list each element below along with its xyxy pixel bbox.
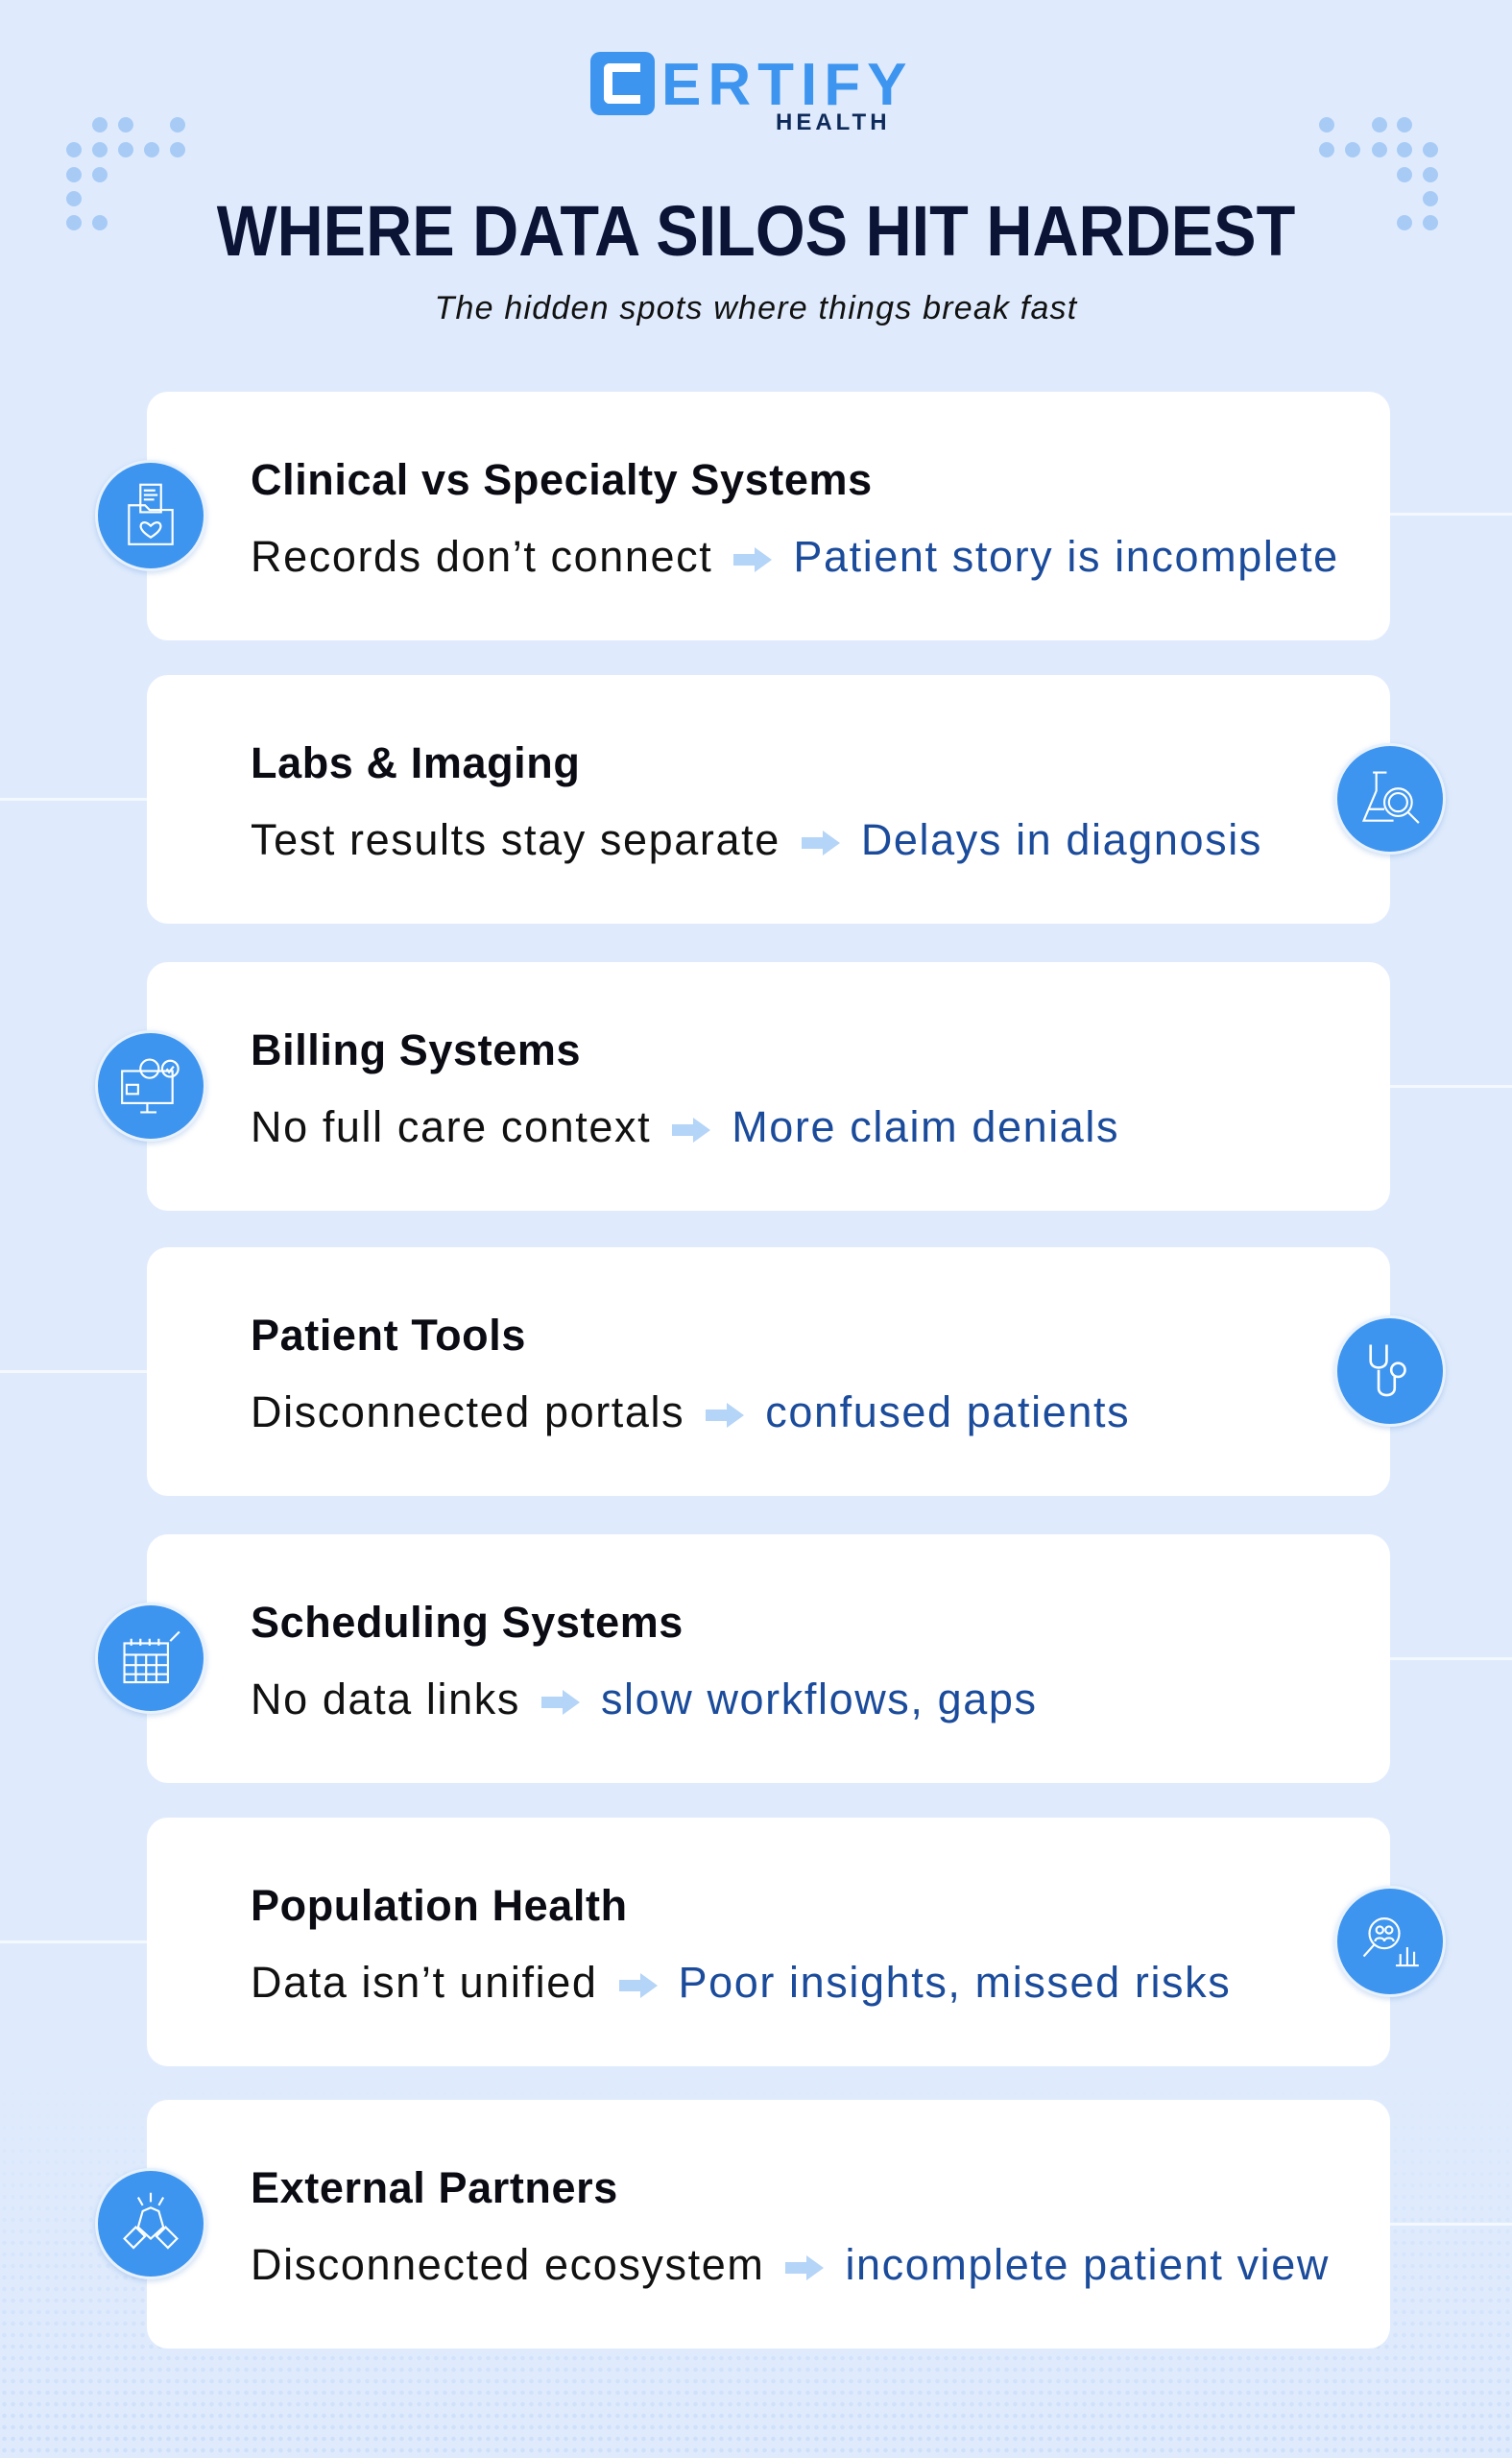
- icon: calendar: [95, 1603, 206, 1714]
- decorative dots left: [66, 117, 185, 230]
- panel: clinical vs specialty: Records don’t connect Patient story is incomplete: [251, 532, 1339, 581]
- panel: labs & imaging: Labs & Imaging: [251, 738, 580, 787]
- panel: external partners: [147, 2100, 1390, 2349]
- panel: population health: Population Health: [251, 1881, 628, 1930]
- panel: population health: Data isn’t unified Poor insights, missed risks: [251, 1958, 1231, 2007]
- subtitle: The hidden spots where things break fast: [435, 290, 1077, 326]
- panel: billing: Billing Systems: [251, 1025, 581, 1074]
- panel: clinical vs specialty: Clinical vs Specialty Systems: [251, 455, 873, 504]
- icon: population: [1334, 1886, 1446, 1997]
- panel: scheduling: No data links slow workflows, gaps: [251, 1675, 1038, 1723]
- icon: stethoscope: [1334, 1315, 1446, 1427]
- panel: patient tools: Patient Tools: [251, 1311, 526, 1360]
- panel: labs & imaging: Test results stay separate Delays in diagnosis: [251, 815, 1262, 864]
- panel: labs & imaging: [147, 675, 1390, 924]
- icon: flask: [1334, 743, 1446, 855]
- panel: scheduling: [147, 1534, 1390, 1783]
- panel: patient tools: Disconnected portals confused patients: [251, 1387, 1130, 1436]
- panel: billing: [147, 962, 1390, 1211]
- panel: external partners: External Partners: [251, 2163, 618, 2212]
- icon: billing monitor: [95, 1030, 206, 1142]
- panel: external partners: Disconnected ecosystem incomplete patient view: [251, 2240, 1330, 2289]
- panel: clinical vs specialty: [147, 392, 1390, 640]
- title: WHERE DATA SILOS HIT HARDEST: [217, 191, 1295, 271]
- panel: population health: [147, 1818, 1390, 2066]
- logo: ERTIFY: [661, 52, 913, 118]
- panel: scheduling: Scheduling Systems: [251, 1598, 684, 1647]
- logo: HEALTH: [776, 109, 891, 135]
- logo: [590, 52, 913, 135]
- icon: records: [95, 460, 206, 571]
- panel: billing: No full care context More claim denials: [251, 1102, 1119, 1151]
- icon: handshake: [95, 2168, 206, 2279]
- decorative dots right: [1319, 117, 1438, 230]
- panel: patient tools: [147, 1247, 1390, 1496]
